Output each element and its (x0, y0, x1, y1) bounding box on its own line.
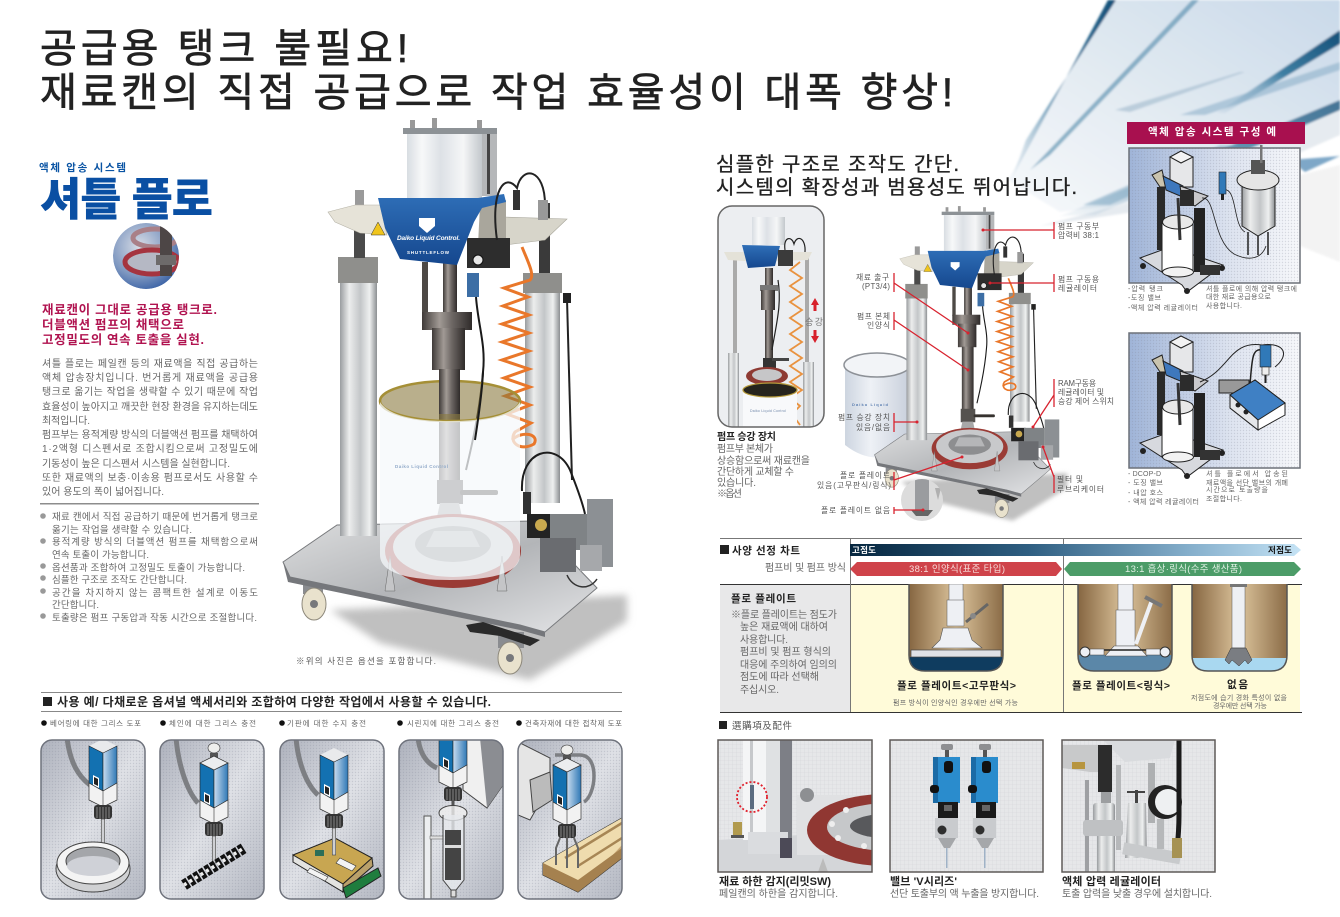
config text 2: 재료액을 선단 밸브의 개폐 (1206, 478, 1288, 487)
callout labels: 플로 플레이트 없음 (821, 505, 890, 515)
right heading (716, 153, 1077, 199)
red subheading: 재료캔이 그대로 공급용 탱크로. (42, 302, 217, 317)
caption: regulator: 토출 압력을 낮출 경우에 설치합니다. (1062, 887, 1212, 900)
title: 공급용 탱크 불필요! (40, 27, 408, 71)
options heading: 選購項及配件 (732, 720, 792, 732)
green range arrow (1064, 562, 1301, 576)
inset caption: 펌프 승강 장치 (717, 431, 776, 443)
spec chart: 없음 (1227, 678, 1248, 691)
main product photo: shuttle flow machine (283, 118, 627, 680)
caption: valve: 밸브 'V시리즈' (890, 874, 957, 888)
photo: material low-limit sensor (717, 739, 873, 873)
inset caption (717, 431, 810, 500)
main product photo: shuttle flow machine: Daiko Liquid Control (395, 464, 448, 469)
bullet list: 간단합니다. (52, 600, 99, 611)
config text 2: 시간으로 토출량을 (1206, 485, 1269, 494)
spec chart side panel: 펌프비 및 펌프 형식의 (740, 646, 831, 658)
spare can (844, 353, 910, 458)
viscosity arrow bar: 고점도 (852, 545, 876, 555)
config diagram: pressure tank (1129, 145, 1300, 294)
inset caption: 상승함으로써 재료캔을 (717, 455, 810, 467)
body text: 또한 재료액의 보충·이송용 펌프로서도 사용할 수 (42, 472, 258, 484)
usage labels: 체인에 대한 그리스 충전 (169, 718, 256, 728)
callout labels: 승강 제어 스위치 (1058, 396, 1114, 406)
config text 1: -도징 밸브 (1128, 293, 1162, 302)
usage labels: 베어링에 대한 그리스 도포 (50, 718, 141, 728)
config banner: 액체 압송 시스템 구성 예 (1148, 125, 1276, 138)
spec chart: 펌프비 및 펌프 방식 (765, 562, 846, 574)
callout labels: 레귤레이터 및 (1058, 387, 1104, 397)
config diagram: DCOP controller (1129, 333, 1300, 479)
inset caption: 펌프부 본체가 (717, 443, 773, 455)
bullet list: 옵션품과 조합하여 고정밀도 토출이 가능합니다. (52, 562, 245, 574)
spec chart side panel (720, 584, 850, 712)
can: no plate (1192, 584, 1287, 671)
inset caption: 간단하게 교체할 수 (717, 465, 794, 478)
body text: 1·2액형 디스펜서로 조합시킴으로써 고정밀도에 (42, 443, 258, 455)
callout labels (817, 221, 1114, 515)
callout labels: RAM구동용 (1058, 379, 1096, 388)
spec chart: 플로 플레이트<링식> (1072, 679, 1170, 692)
config text 2: - 액체 압력 레귤레이터 (1128, 497, 1199, 506)
panel: bearing grease (41, 738, 145, 899)
right heading: 심플한 구조로 조작도 간단. (716, 153, 959, 176)
bullet list: 재료 캔에서 직접 공급하기 때문에 번거롭게 탱크로 (52, 511, 258, 523)
can: rubber plate (909, 584, 1003, 671)
red range arrow (850, 562, 1062, 576)
callout labels: 펌프 구동부 (1058, 221, 1099, 231)
caption: regulator: 액체 압력 레귤레이터 (1062, 874, 1161, 888)
photo: V series valve (890, 740, 1043, 872)
body text: 액체 압송장치입니다. 번거롭게 재료액을 공급용 (42, 371, 258, 384)
spec chart (720, 538, 1302, 713)
caption: valve: 선단 토출부의 액 누출을 방지합니다. (890, 888, 1039, 900)
config text 1: -압력 탱크 (1128, 284, 1164, 293)
config text 1: 대한 재료 공급용으로 (1206, 293, 1272, 301)
usage heading: 사용 예/ 다채로운 옵셔널 액세서리와 조합하여 다양한 작업에서 사용할 수 있습니다. (57, 694, 491, 709)
spec chart side panel: 점도에 따라 선택해 (740, 670, 819, 683)
inset: pump lift device: Daiko Liquid Control (750, 409, 786, 413)
bullet list: 용적계량 방식의 더블액션 펌프를 채택함으로써 (52, 536, 258, 548)
bullet list: 심플한 구조로 조작도 간단합니다. (52, 575, 187, 586)
config text 2: - 도징 밸브 (1128, 478, 1164, 487)
config text 1: 셔틀 플로에 의해 압력 탱크에 (1206, 284, 1297, 293)
product name heading: 셔틀 플로 (40, 174, 213, 225)
caption: regulator (1062, 874, 1212, 900)
config text 2: - DCOP-D (1128, 471, 1161, 478)
callouts (894, 222, 1054, 514)
product name heading: 액체 압송 시스템 (39, 161, 126, 174)
caption: valve (890, 874, 1039, 900)
annotated machine (874, 206, 1067, 521)
spec chart side panel: 사용합니다. (740, 634, 788, 646)
red subheading (42, 302, 217, 347)
usage heading (41, 692, 622, 712)
config text 1: -액체 압력 레귤레이터 (1128, 303, 1198, 312)
green range arrow: 13:1 흡상·링식(수주 생산품) (1125, 563, 1242, 575)
caption: sensor (719, 874, 838, 900)
spec chart side panel: 높은 재료액에 대하여 (740, 620, 828, 633)
body text: 탱크로 옮기는 작업을 생략할 수 있기 때문에 작업 (42, 385, 258, 398)
bullet list: 토출량은 펌프 구동압과 작동 시간으로 조절합니다. (52, 612, 257, 624)
photo: liquid pressure regulator (1062, 740, 1215, 872)
spec chart: 펌프 방식이 인양식인 경우에만 선택 가능 (893, 698, 1019, 707)
right heading: 시스템의 확장성과 범용성도 뛰어납니다. (716, 176, 1077, 199)
spec chart: 저점도에 습기 경화 특성이 없을 (1191, 693, 1288, 702)
panel: circuit board resin (280, 738, 384, 899)
panel: construction adhesive (518, 740, 622, 899)
config text 1 (1128, 284, 1297, 312)
bullet list: 연속 토출이 가능합니다. (52, 550, 149, 561)
viscosity arrow bar: 저점도 (1268, 545, 1292, 555)
callout labels: (PT3/4) (862, 282, 890, 291)
config text 2: - 내압 호스 (1128, 488, 1164, 497)
spare can: Daiko Liquid (852, 402, 889, 407)
config banner (1127, 122, 1305, 144)
body text: 기동성이 높은 디스펜서 시스템을 실현합니다. (42, 458, 230, 470)
callout labels: 플로 플레이트 (840, 470, 890, 480)
spec chart: 경우에만 선택 가능 (1213, 701, 1268, 710)
callout labels: 펌프 구동용 (1058, 274, 1099, 284)
body text (42, 357, 258, 498)
spec chart side panel: 주십시오. (740, 684, 779, 696)
photo note: ※위의 사진은 옵션을 포함합니다. (296, 656, 436, 666)
red subheading: 더블액션 펌프의 채택으로 (42, 318, 184, 332)
spec chart: 플로 플레이트<고무판식> (897, 679, 1016, 692)
bullet list: 공간을 차지하지 않는 콤팩트한 설계로 이동도 (52, 587, 258, 599)
main product photo: shuttle flow machine: Daiko Liquid Control. (397, 235, 460, 242)
callout labels: 재료 출구 (856, 272, 889, 282)
red range arrow: 38:1 인양식(표준 타입) (909, 563, 1005, 575)
panel: syringe grease (399, 721, 503, 900)
caption: sensor: 페일캔의 하한을 감지합니다. (719, 887, 838, 900)
inset caption: ※옵션 (717, 488, 742, 500)
callout labels: 펌프 승강 장치 (838, 412, 890, 422)
inset caption: 있습니다. (717, 477, 756, 489)
callout labels: 펌프 본체 (857, 311, 890, 321)
bullet list: 옮기는 작업을 생략할 수 있습니다. (52, 524, 192, 536)
usage labels: 기판에 대한 수지 충전 (287, 718, 366, 728)
config text 2 (1128, 469, 1288, 506)
body text: 셔틀 플로는 페일캔 등의 재료액을 직접 공급하는 (42, 357, 258, 370)
spec chart: 사양 선정 차트 (732, 544, 800, 557)
red subheading: 고정밀도의 연속 토출을 실현. (42, 332, 204, 347)
caption: sensor: 재료 하한 감지(리밋SW) (719, 874, 831, 888)
callout labels: 루브리케이터 (1057, 484, 1104, 494)
config text 2: 조절합니다. (1206, 494, 1242, 503)
inset: pump lift device (718, 206, 824, 430)
callout labels: 있음/없음 (856, 423, 890, 432)
callout labels: 있음(고무판식/링식) (817, 480, 891, 490)
inset: pump lift device: 승강 (805, 317, 823, 327)
config text 2: 셔틀 플로에서 압송된 (1206, 469, 1288, 478)
viscosity arrow bar (850, 544, 1301, 556)
background swoosh (1008, 0, 1340, 262)
spec chart side panel: 플로 플레이트 (731, 592, 796, 605)
title (40, 27, 953, 115)
config text 1: 사용합니다. (1206, 301, 1242, 310)
body text: 펌프부는 용적계량 방식의 더블액션 펌프를 채택하여 (42, 428, 258, 441)
panel: chain grease (160, 738, 264, 899)
body text: 있어 용도의 폭이 넓어집니다. (42, 486, 164, 498)
spec chart side panel: 대응에 주의하여 임의의 (740, 658, 837, 671)
callout labels: 인양식 (867, 320, 890, 330)
callout labels: 압력비 38:1 (1058, 231, 1099, 240)
bullet list (40, 511, 258, 624)
callout labels: 레귤레이터 (1058, 283, 1097, 293)
can: ring plate (1078, 584, 1172, 671)
body text: 최적입니다. (42, 414, 90, 427)
spec chart side panel: ※플로 플레이트는 점도가 (731, 609, 837, 621)
title: 재료캔의 직접 공급으로 작업 효율성이 대폭 향상! (40, 71, 953, 115)
body text: 효율성이 높아지고 깨끗한 현장 환경을 유지하는데도 (42, 400, 258, 413)
icon: pump plate circle (113, 223, 179, 289)
usage labels: 건축자재에 대한 접착제 도포 (525, 718, 622, 728)
main product photo: shuttle flow machine: SHUTTLEFLOW (407, 250, 450, 255)
usage labels: 시린지에 대한 그리스 충전 (407, 718, 499, 728)
usage labels (41, 718, 622, 728)
callout labels: 필터 및 (1057, 474, 1083, 484)
